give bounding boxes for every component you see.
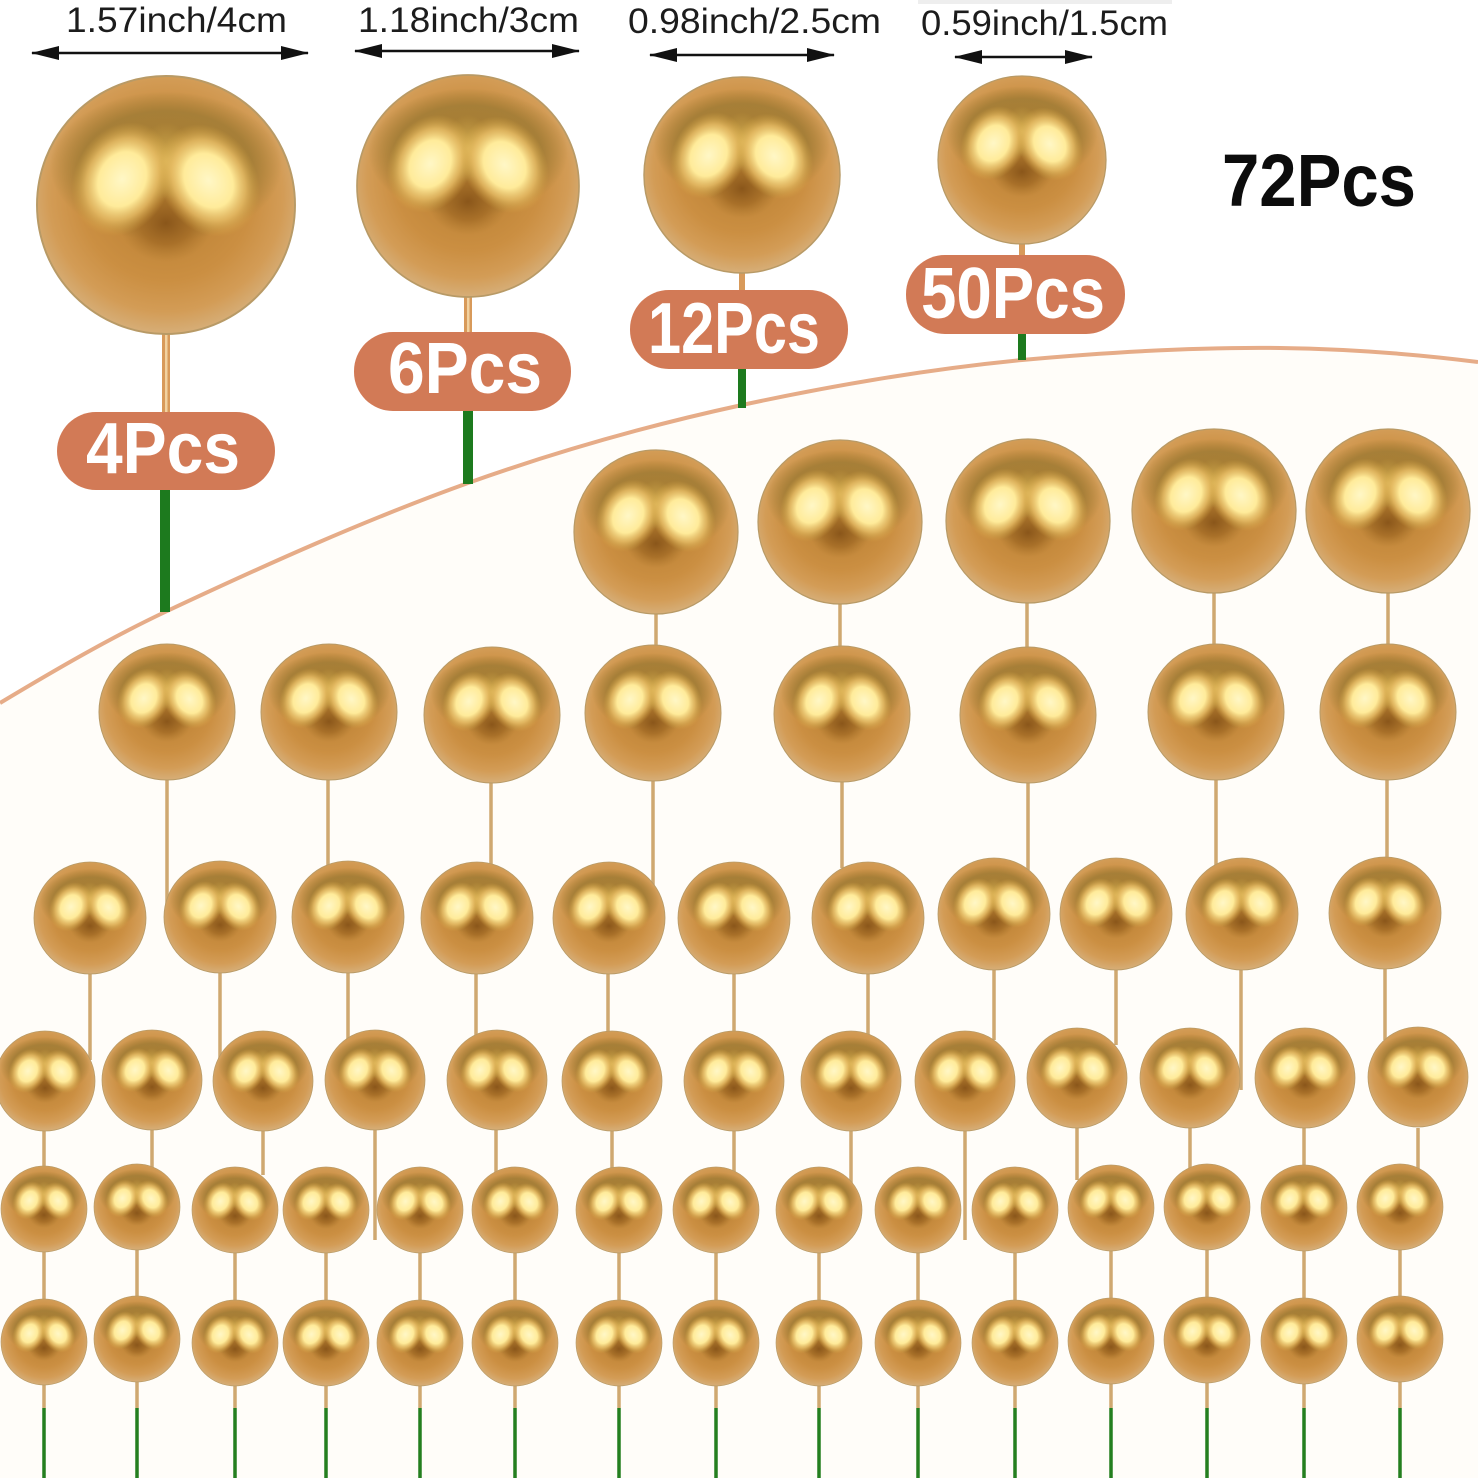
size label: 4cm: 1.57inch/4cm — [66, 1, 287, 40]
item: 4cm ball with stem and 4Pcs tag — [37, 76, 295, 612]
balls row 4 — [0, 1027, 1468, 1131]
item: 2.5cm ball with stem and 12Pcs tag: 12Pcs — [648, 289, 820, 369]
green stem tips — [44, 1408, 1400, 1478]
size label: 1.5cm: 0.59inch/1.5cm — [921, 4, 1168, 43]
balls row 3 — [34, 857, 1441, 974]
curve line — [0, 348, 1478, 703]
cream curved panel — [0, 348, 1478, 1478]
item: 1.5cm ball with stem and 50Pcs tag — [906, 76, 1125, 360]
item: 3cm ball with stem and 6Pcs tag: 6Pcs — [388, 329, 542, 409]
stems of the ball grid — [44, 590, 1418, 1408]
total count heading: 72Pcs — [1222, 139, 1416, 222]
item: 4cm ball with stem and 4Pcs tag: 4Pcs — [86, 409, 240, 489]
balls row 2 — [99, 644, 1456, 783]
size label: 3cm: 1.18inch/3cm — [358, 1, 579, 40]
item: 3cm ball with stem and 6Pcs tag — [354, 75, 579, 484]
balls row 1 — [574, 429, 1470, 614]
item: 1.5cm ball with stem and 50Pcs tag: 50Pcs — [921, 254, 1105, 334]
size label: 1.5cm — [918, 0, 1172, 57]
balls row 5 — [1, 1164, 1443, 1253]
size label: 2.5cm: 0.98inch/2.5cm — [628, 2, 881, 41]
item: 2.5cm ball with stem and 12Pcs tag — [630, 77, 848, 408]
balls row 6 — [1, 1296, 1443, 1386]
